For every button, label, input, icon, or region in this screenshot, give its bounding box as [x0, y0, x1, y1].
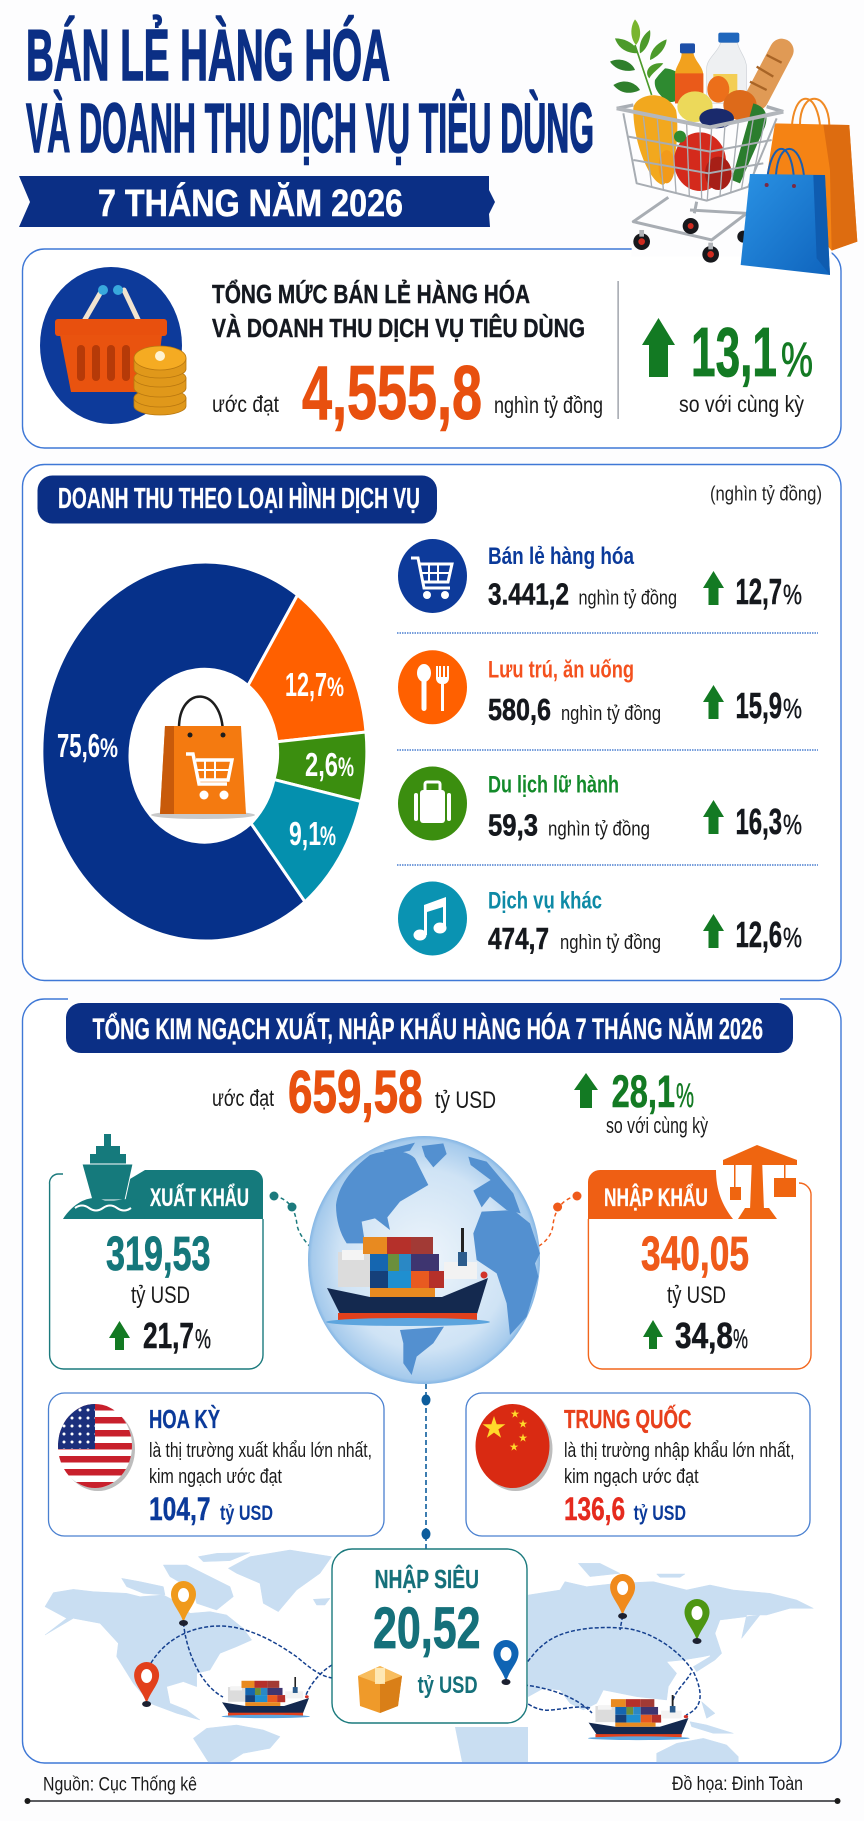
tab: export: XUẤT KHẨU — [150, 1183, 249, 1212]
world map: Americas — [45, 1550, 332, 1762]
title — [26, 15, 594, 167]
trade total growth: 28,1 — [612, 1066, 675, 1117]
total value: ước đạt — [212, 391, 280, 417]
card: China: kim ngạch ước đạt — [564, 1466, 699, 1488]
total growth: 13,1 — [691, 313, 777, 391]
ship: left map — [222, 1677, 310, 1718]
pin: blue — [494, 1640, 518, 1685]
blue bag — [741, 149, 830, 275]
trade total value: 659,58 — [288, 1059, 423, 1126]
cart frame — [617, 105, 783, 240]
card: China: 136,6 — [564, 1491, 625, 1527]
panel: revenue by service type — [22, 464, 841, 980]
routes: left map — [151, 1623, 332, 1697]
import value: 340,05 — [641, 1228, 749, 1281]
total value: nghìn tỷ đồng — [494, 392, 603, 418]
bottles — [675, 33, 747, 103]
trade total growth — [574, 1066, 708, 1138]
pin: orange — [171, 1581, 196, 1626]
orange bag — [767, 99, 857, 251]
import unit: tỷ USD — [667, 1282, 726, 1309]
donut chart: % — [100, 733, 118, 763]
export growth: 21,7 — [143, 1315, 194, 1356]
title: BÁN LẺ HÀNG HÓA — [26, 15, 390, 96]
card: United States: 104,7 — [149, 1491, 210, 1527]
baguette — [750, 51, 782, 98]
item: other services: nghìn tỷ đồng — [560, 932, 661, 954]
icon: music note — [398, 882, 467, 956]
trade total value: ước đạt — [212, 1085, 274, 1111]
greens — [610, 19, 687, 102]
card: China: là thị trường nhập khẩu lớn nhất, — [564, 1440, 794, 1462]
banner: 7 tháng năm 2026 — [19, 176, 495, 227]
item: tourism: 16,3 — [736, 801, 782, 842]
panel: import and export — [22, 994, 841, 1763]
heading pill: DOANH THU THEO LOẠI HÌNH DỊCH VỤ — [58, 481, 420, 515]
import growth — [643, 1315, 748, 1356]
item: accommodation and food: 580,6 — [488, 692, 551, 727]
item: tourism: nghìn tỷ đồng — [548, 818, 650, 840]
heading pill — [66, 1003, 793, 1053]
export value: 319,53 — [106, 1228, 210, 1281]
connector: export — [270, 1192, 325, 1263]
icon: crane — [723, 1145, 797, 1219]
card: imports — [588, 1145, 811, 1369]
heading: total retail: TỔNG MỨC BÁN LẺ HÀNG HÓA — [212, 279, 530, 309]
item: accommodation and food: % — [783, 693, 802, 724]
icon: shopping basket with coins — [40, 267, 186, 424]
panel: total retail — [22, 249, 841, 448]
total value — [212, 351, 603, 436]
donut chart: % — [320, 821, 336, 851]
item: accommodation and food — [398, 650, 802, 727]
item: retail goods: 12,7 — [736, 571, 782, 612]
connector: vertical — [422, 1384, 430, 1550]
card: exports — [50, 1134, 263, 1369]
card: trade deficit: NHẬP SIÊU — [375, 1564, 479, 1594]
world map: Eurasia — [528, 1563, 813, 1762]
icon: spoon and fork — [398, 650, 467, 724]
trade total value — [212, 1059, 496, 1126]
item: tourism: 59,3 — [488, 807, 538, 842]
item: tourism: % — [783, 809, 802, 840]
banner: 7 tháng năm 2026: 7 THÁNG NĂM 2026 — [98, 181, 403, 225]
card: United States: tỷ USD — [220, 1502, 273, 1525]
total growth: so với cùng kỳ — [679, 391, 804, 417]
donut chart: 9,1 — [289, 815, 321, 852]
icon: ship — [63, 1134, 145, 1219]
item: accommodation and food: Lưu trú, ăn uống — [488, 657, 634, 684]
card: trade deficit — [332, 1549, 527, 1723]
import growth: 34,8 — [675, 1315, 733, 1356]
total growth: % — [781, 334, 813, 387]
card: United States — [48, 1393, 384, 1536]
wheels — [633, 218, 749, 263]
donut chart: 2,6 — [305, 746, 338, 783]
donut chart: % — [338, 752, 354, 782]
item: retail goods: Bán lẻ hàng hóa — [488, 543, 635, 570]
routes: right map — [506, 1616, 700, 1715]
card: trade deficit: 20,52 — [373, 1596, 480, 1661]
item: other services: Dịch vụ khác — [488, 888, 602, 915]
donut chart: % — [327, 672, 344, 702]
item: other services: 474,7 — [488, 921, 549, 956]
item: retail goods: 3.441,2 — [488, 577, 569, 612]
item: retail goods: nghìn tỷ đồng — [578, 588, 677, 610]
card: trade deficit: tỷ USD — [418, 1672, 478, 1699]
world map: Africa — [455, 1727, 528, 1762]
item: retail goods: % — [783, 579, 802, 610]
ship: right map — [588, 1695, 690, 1740]
item: other services: % — [783, 922, 802, 953]
import growth: % — [733, 1324, 748, 1354]
trade total value: tỷ USD — [435, 1087, 496, 1114]
trade total growth: % — [676, 1077, 694, 1115]
card: United States: HOA KỲ — [149, 1404, 220, 1434]
export growth — [109, 1315, 211, 1356]
footer: Đồ họa: Đinh Toàn — [672, 1774, 803, 1795]
connector: import — [537, 1192, 582, 1247]
globe with cargo ship — [308, 1136, 540, 1384]
card: United States: kim ngạch ước đạt — [149, 1466, 282, 1488]
footer — [24, 1774, 840, 1804]
unit note: (nghìn tỷ đồng) — [710, 482, 822, 506]
export unit: tỷ USD — [131, 1282, 190, 1309]
total growth — [642, 313, 813, 417]
tab: import — [588, 1170, 733, 1219]
icon: box — [358, 1666, 402, 1713]
card: China: tỷ USD — [634, 1502, 686, 1525]
icon: suitcase — [398, 766, 467, 840]
heading: total retail: VÀ DOANH THU DỊCH VỤ TIÊU DÙNG — [212, 313, 585, 343]
trade total growth: so với cùng kỳ — [606, 1113, 708, 1138]
export growth: % — [195, 1324, 211, 1354]
item: retail goods — [398, 539, 802, 613]
card: China — [466, 1393, 810, 1536]
icon: shopping bag — [151, 697, 255, 819]
tab: export — [63, 1170, 263, 1219]
item: accommodation and food: nghìn tỷ đồng — [561, 703, 661, 725]
total value: 4,555,8 — [302, 351, 482, 436]
pin: green — [684, 1599, 710, 1644]
flag: China — [476, 1404, 552, 1491]
heading pill — [38, 476, 437, 524]
donut chart: 12,7 — [285, 666, 327, 703]
item: tourism: Du lịch lữ hành — [488, 772, 619, 799]
donut chart — [42, 562, 367, 941]
illustration: shopping cart and bags — [610, 19, 857, 275]
produce — [633, 76, 766, 191]
card: United States: là thị trường xuất khẩu lớn nhất, — [149, 1440, 372, 1462]
item: tourism — [398, 766, 802, 842]
item: accommodation and food: 15,9 — [736, 685, 782, 726]
pin: orange east — [610, 1574, 635, 1619]
card: China: TRUNG QUỐC — [564, 1404, 692, 1434]
pin: red — [134, 1662, 159, 1707]
item: other services — [398, 882, 802, 956]
flag: USA — [58, 1404, 135, 1491]
heading: total retail — [212, 279, 585, 343]
icon: cart — [398, 539, 467, 613]
item: other services: 12,6 — [736, 914, 782, 955]
donut chart: 75,6 — [57, 727, 100, 764]
footer: Nguồn: Cục Thống kê — [43, 1775, 197, 1796]
tab: import: NHẬP KHẨU — [604, 1182, 708, 1212]
